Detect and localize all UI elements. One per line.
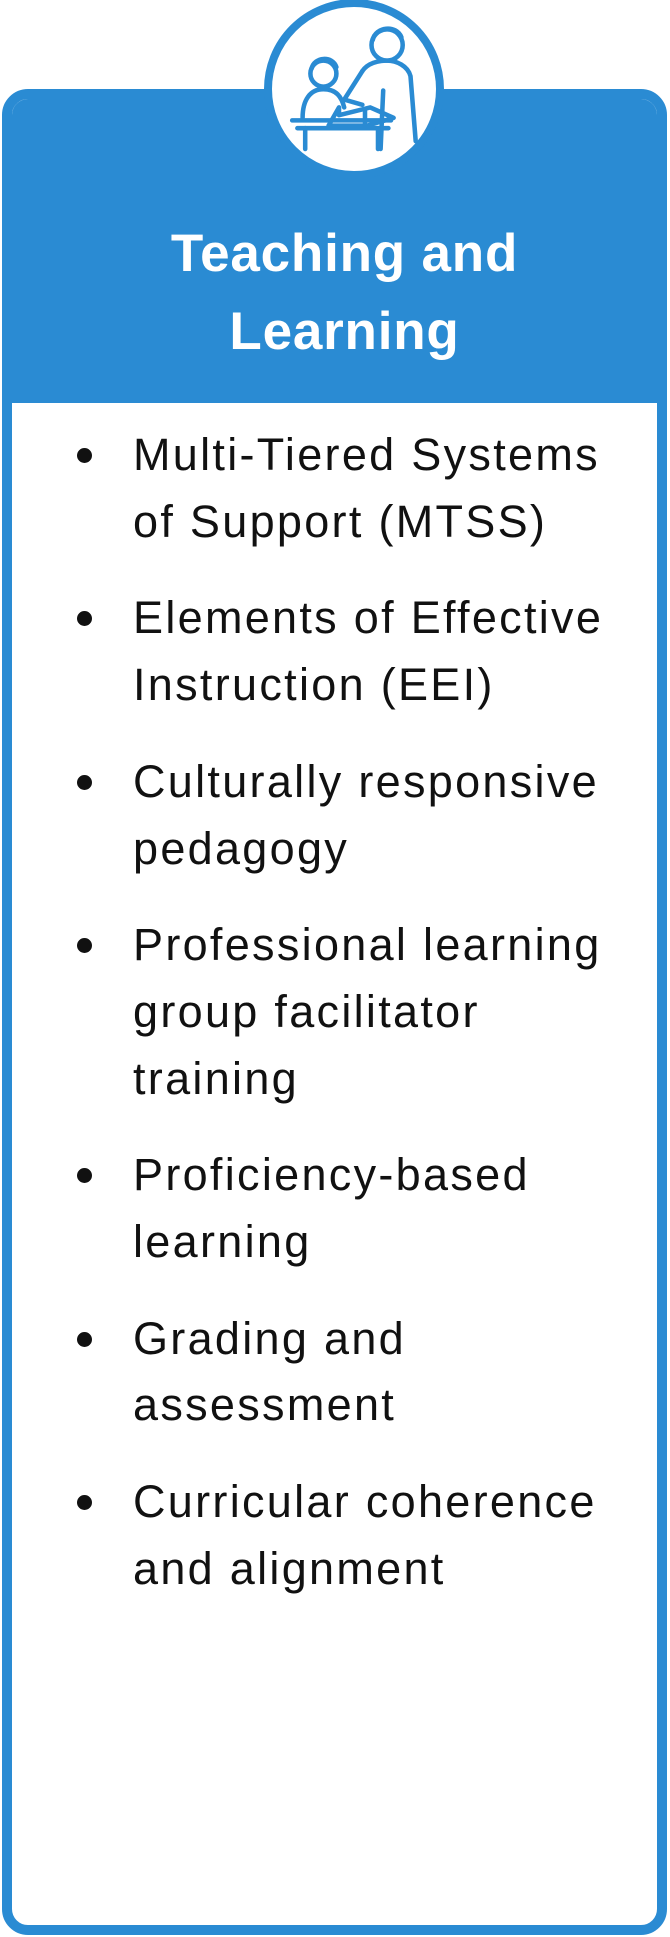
item: MTSS: Multi-Tiered Systems (133, 429, 600, 480)
item: MTSS: of Support (MTSS) (133, 496, 547, 547)
item: EEI (77, 592, 603, 710)
item: facilitator training (77, 919, 602, 1104)
item: EEI: Elements of Effective (133, 592, 603, 643)
item: curricular: and alignment (133, 1543, 446, 1594)
bullet list (77, 429, 603, 1594)
item: proficiency: Proficiency-based (133, 1149, 530, 1200)
title (171, 224, 518, 361)
item: EEI: Instruction (EEI) (133, 659, 495, 710)
item: proficiency: learning (133, 1216, 312, 1267)
item: pedagogy (77, 756, 599, 874)
item: facilitator training: training (133, 1053, 299, 1104)
header band (12, 99, 657, 403)
item: MTSS (77, 429, 600, 547)
item: curricular (77, 1476, 597, 1594)
item: facilitator training: Professional learning (133, 919, 602, 970)
item: proficiency (77, 1149, 530, 1267)
item: facilitator training: group facilitator (133, 986, 480, 1037)
title: Teaching and (171, 224, 518, 283)
item: pedagogy: Culturally responsive (133, 756, 599, 807)
item: pedagogy: pedagogy (133, 823, 349, 874)
item: grading: assessment (133, 1379, 396, 1430)
item: grading (77, 1313, 406, 1430)
icon: teacher and student reading (264, 0, 444, 179)
item: curricular: Curricular coherence (133, 1476, 597, 1527)
item: grading: Grading and (133, 1313, 406, 1364)
title: Learning (229, 302, 460, 361)
